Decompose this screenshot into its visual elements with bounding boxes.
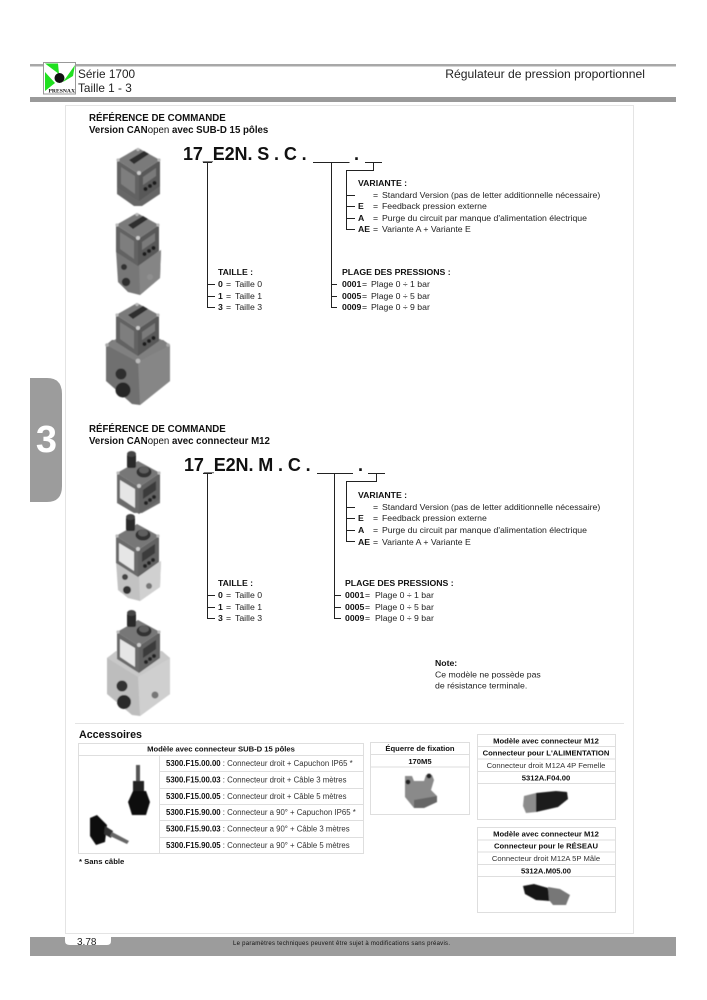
disclaimer: Le paramètres techniques peuvent être sujet à modifications sans préavis. [233, 941, 450, 947]
taille block: SUB-D: = [226, 279, 231, 289]
section heading: M12: Version CANopen avec connecteur M12 [89, 436, 270, 447]
section heading: SUB-D: RÉFÉRENCE DE COMMANDE [89, 113, 226, 124]
code tree: SUB-D [203, 162, 382, 308]
table: M12 network connector: 5312A.M05.00 [521, 866, 571, 876]
variante block: SUB-D: = [373, 213, 378, 223]
table: SUB-D connectors: 5300.F15.90.00 : Connecteur a 90° + Capuchon IP65 * [166, 808, 356, 817]
code tree: M12 [203, 474, 385, 618]
pressure block: M12: Plage 0 ÷ 1 bar [375, 590, 434, 600]
pressure block: M12: = [365, 613, 370, 623]
main content panel [66, 106, 634, 934]
text: . [354, 144, 359, 164]
variante block: M12: AE [358, 537, 370, 547]
taille block: SUB-D: Taille 0 [235, 279, 262, 289]
icon: M12 female connector [523, 791, 568, 813]
variante block: SUB-D: Standard Version (pas de letter additionnelle nécessaire) [382, 190, 600, 200]
taille block: M12: Taille 3 [235, 613, 262, 623]
variante block: M12: = [373, 537, 378, 547]
order code: SUB-D: 17_E2N. S . C . [183, 144, 307, 164]
device size 1 [115, 213, 161, 295]
table: bracket: Équerre de fixation [385, 744, 455, 753]
product images: SUB-D [105, 148, 170, 405]
section heading: M12 [89, 424, 270, 447]
taille block: M12: = [226, 613, 231, 623]
variante block: SUB-D [358, 178, 600, 234]
variante block: M12: A [358, 525, 365, 535]
variante block: SUB-D: A [358, 213, 365, 223]
pressure block: SUB-D: Plage 0 ÷ 5 bar [371, 291, 430, 301]
pressure block: M12: 0009 [345, 613, 364, 623]
variante block: SUB-D: = [373, 190, 378, 200]
table: SUB-D connectors: 5300.F15.90.03 : Connecteur a 90° + Câble 3 mètres [166, 824, 350, 834]
series label: Taille 1 - 3 [78, 81, 132, 95]
taille block: M12: 1 [218, 602, 223, 612]
pressure block: M12: Plage 0 ÷ 9 bar [375, 613, 434, 623]
icon: straight connector [128, 765, 150, 815]
device size 0 [116, 148, 161, 206]
icon: M12 male connector [523, 884, 570, 905]
table: M12 network connector: Connecteur droit M12A 5P Mâle [492, 854, 600, 863]
accessories heading: Accessoires [79, 729, 142, 741]
variante block: M12: = [373, 525, 378, 535]
pressure block: SUB-D: Plage 0 ÷ 1 bar [371, 279, 430, 289]
chapter tab [30, 378, 62, 502]
page number tab: 3.78 [77, 937, 97, 948]
table: SUB-D connectors: 5300.F15.00.05 : Connecteur droit + Câble 5 mètres [166, 792, 347, 801]
series label: Série 1700 [78, 67, 135, 81]
section heading: SUB-D [89, 113, 268, 136]
pressure block: M12 [345, 578, 454, 623]
variante block: SUB-D: Variante A + Variante E [382, 224, 471, 234]
pressure block: SUB-D: Plage 0 ÷ 9 bar [371, 302, 430, 312]
logo: Presnax [44, 62, 76, 94]
pressure block: SUB-D: PLAGE DES PRESSIONS : [342, 267, 451, 277]
variante block: M12: Standard Version (pas de letter additionnelle nécessaire) [382, 502, 600, 512]
taille block: M12: Taille 1 [235, 602, 262, 612]
pressure block: SUB-D: 0009 [342, 302, 361, 312]
chapter tab: 3 [36, 419, 57, 461]
taille block: SUB-D: 0 [218, 279, 223, 289]
pressure block: M12: = [365, 602, 370, 612]
accessories divider [75, 723, 624, 724]
device size 3 [107, 610, 170, 716]
table: bracket: 170M5 [408, 757, 432, 766]
variante block: SUB-D: AE [358, 224, 370, 234]
icon: angled connector [90, 815, 129, 845]
pressure block: M12: PLAGE DES PRESSIONS : [345, 578, 454, 588]
pressure block: M12: 0001 [345, 590, 364, 600]
variante block: M12 [358, 490, 600, 547]
variante block: SUB-D: = [373, 224, 378, 234]
variante block: M12: VARIANTE : [358, 490, 407, 500]
text: . [358, 455, 363, 475]
variante block: SUB-D: = [373, 201, 378, 211]
variante block: M12: Variante A + Variante E [382, 537, 471, 547]
pressure block: M12: 0005 [345, 602, 364, 612]
taille block: SUB-D: Taille 1 [235, 291, 262, 301]
taille block: SUB-D: = [226, 302, 231, 312]
footnote: * Sans câble [79, 857, 125, 866]
pressure block: SUB-D [342, 267, 451, 312]
taille block: M12: 0 [218, 590, 223, 600]
pressure block: SUB-D: 0005 [342, 291, 361, 301]
section heading: SUB-D: Version CANopen avec SUB-D 15 pôles [89, 125, 268, 136]
taille block: M12: TAILLE : [218, 578, 253, 588]
table: SUB-D connectors: 5300.F15.00.03 : Connecteur droit + Câble 3 mètres [166, 776, 347, 784]
variante block: M12: = [373, 513, 378, 523]
taille block: M12: = [226, 590, 231, 600]
order code: M12: 17_E2N. M . C . [184, 455, 311, 475]
table: M12 network connector: Modèle avec connecteur M12 [493, 830, 599, 838]
footer band [30, 937, 676, 956]
table: SUB-D connectors: 5300.F15.00.00 : Connecteur droit + Capuchon IP65 * [166, 759, 353, 768]
taille block: M12 [218, 578, 262, 623]
note [435, 658, 541, 690]
pressure block: M12: Plage 0 ÷ 5 bar [375, 602, 434, 612]
table: M12 power connector: Connecteur pour L'ALIMENTATION [483, 748, 609, 758]
taille block: SUB-D: 3 [218, 302, 223, 312]
table: M12 power connector: Modèle avec connecteur M12 [493, 736, 599, 746]
taille block: SUB-D: Taille 3 [235, 302, 262, 312]
pressure block: SUB-D: = [362, 279, 367, 289]
page number tab [65, 937, 111, 948]
note: Note: [435, 658, 457, 668]
device size 0 [116, 451, 161, 514]
variante block: M12: = [373, 502, 378, 512]
table: SUB-D connectors: 5300.F15.90.05 : Connecteur a 90° + Câble 5 mètres [166, 841, 350, 850]
table: M12 power connector: Connecteur droit M12A 4P Femelle [487, 761, 605, 770]
logo: Presnax: PRESNAX [48, 88, 75, 94]
header band [30, 62, 676, 102]
table: bracket [370, 742, 470, 814]
variante block: M12: Feedback pression externe [382, 513, 487, 523]
taille block: SUB-D [218, 267, 262, 312]
device size 1 [115, 514, 161, 601]
pressure block: SUB-D: 0001 [342, 279, 361, 289]
taille block: SUB-D: TAILLE : [218, 267, 253, 277]
table: SUB-D connectors [78, 744, 364, 854]
table: M12 power connector [478, 734, 616, 820]
taille block: SUB-D: 1 [218, 291, 223, 301]
variante block: SUB-D: VARIANTE : [358, 178, 407, 188]
table: M12 power connector: 5312A.F04.00 [522, 774, 570, 782]
section heading: M12: RÉFÉRENCE DE COMMANDE [89, 424, 226, 435]
taille block: M12: 3 [218, 613, 223, 623]
icon: mounting bracket [405, 774, 437, 808]
pressure block: M12: = [365, 590, 370, 600]
series label [78, 67, 135, 95]
taille block: M12: Taille 0 [235, 590, 262, 600]
note: de résistance terminale. [435, 680, 527, 690]
taille block: M12: = [226, 602, 231, 612]
note: Ce modèle ne possède pas [435, 670, 541, 680]
variante block: SUB-D: Feedback pression externe [382, 201, 487, 211]
variante block: M12: E [358, 513, 364, 523]
variante block: M12: Purge du circuit par manque d'alimentation électrique [382, 525, 587, 535]
taille block: SUB-D: = [226, 291, 231, 301]
table: M12 network connector: Connecteur pour le RÉSEAU [494, 842, 598, 850]
variante block: SUB-D: Purge du circuit par manque d'alimentation électrique [382, 213, 587, 223]
table: SUB-D connectors: Modèle avec connecteur SUB-D 15 pôles [147, 744, 295, 754]
page title: Régulateur de pression proportionnel [445, 67, 645, 81]
pressure block: SUB-D: = [362, 302, 367, 312]
pressure block: SUB-D: = [362, 291, 367, 301]
device size 3 [105, 303, 170, 405]
product images: M12 [107, 451, 170, 716]
table: M12 network connector [478, 828, 616, 912]
variante block: SUB-D: E [358, 201, 364, 211]
